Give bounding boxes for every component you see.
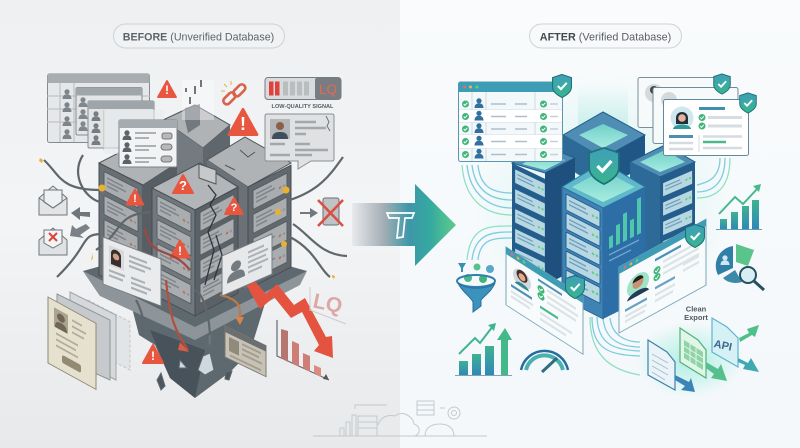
warning: crack: ? xyxy=(231,202,238,214)
table: third sheet xyxy=(88,101,164,154)
warning: front block: ? xyxy=(179,178,187,193)
glow behind servers xyxy=(473,70,733,330)
icon: pie with magnifier xyxy=(716,244,764,290)
panel: before (unverified database) xyxy=(39,24,347,398)
icon: broken chain link xyxy=(221,81,247,106)
arrow: to envelope top xyxy=(71,207,90,220)
right server block xyxy=(630,145,695,290)
verified profile cards xyxy=(638,78,748,156)
profile card: silhouette xyxy=(222,234,272,296)
export: API file: API xyxy=(713,338,733,354)
profile card: woman xyxy=(103,237,161,306)
heading: before xyxy=(114,24,284,48)
falling red trend arrow xyxy=(245,279,333,358)
warning: lower front xyxy=(170,240,190,258)
left server block xyxy=(512,146,575,297)
logo: T mark xyxy=(387,213,414,238)
clean export label: Clean xyxy=(686,304,707,314)
warning: left block: ! xyxy=(133,193,137,205)
profile card: back xyxy=(638,78,720,128)
table: front sheet xyxy=(119,120,177,167)
heading: before: BEFORE (Unverified Database) xyxy=(123,32,274,44)
profile card: front xyxy=(664,100,748,156)
data flow lines xyxy=(462,158,730,375)
heading: after: AFTER (Verified Database) xyxy=(540,32,671,44)
cracked rock base xyxy=(83,240,307,398)
profile card: middle xyxy=(653,88,738,144)
shield: lower right card xyxy=(686,224,704,248)
debris xyxy=(157,335,232,390)
faded ID card xyxy=(225,326,266,377)
warning: left block xyxy=(126,189,144,205)
declining bar chart xyxy=(277,320,329,380)
profile card: lower left xyxy=(506,247,583,354)
front server block xyxy=(152,163,238,316)
table: second sheet xyxy=(76,88,142,135)
warning: under platform xyxy=(143,345,163,363)
warning: large: ! xyxy=(240,114,246,134)
background: before half xyxy=(0,0,400,448)
broken cables xyxy=(44,155,347,350)
low-quality signal meter: LOW-QUALITY SIGNAL xyxy=(272,104,334,110)
warning: under platform: ! xyxy=(151,349,155,363)
panel: after (verified database) xyxy=(455,24,764,398)
profile card: lower right xyxy=(619,219,706,333)
orange arrow into ID card xyxy=(235,317,244,325)
export: document xyxy=(648,340,675,390)
warning: top left xyxy=(158,81,176,97)
warning: lower front: ! xyxy=(178,244,182,258)
icon: gauge xyxy=(521,351,568,372)
sparks xyxy=(39,158,335,279)
profile callout card xyxy=(265,114,334,169)
back server block xyxy=(163,80,230,190)
falling arrow: cable to rock xyxy=(178,342,189,352)
footer line art xyxy=(313,401,487,436)
export: spreadsheet xyxy=(680,328,706,378)
warning: top left: ! xyxy=(165,83,169,97)
shield: lower left card xyxy=(566,275,584,299)
left server block xyxy=(99,147,177,297)
faded profile record xyxy=(48,297,96,389)
warning: front block xyxy=(173,175,193,193)
light beams xyxy=(578,85,628,160)
export glow xyxy=(635,322,745,398)
icon: growth chart xyxy=(455,323,512,376)
shield: front card xyxy=(740,93,756,113)
export arrows xyxy=(675,325,759,392)
warning triangles xyxy=(126,81,257,363)
icon: rising bar chart xyxy=(716,184,762,230)
shield: table xyxy=(553,74,571,98)
envelope: read message xyxy=(39,186,67,215)
center transition arrow xyxy=(352,184,456,266)
export: API file xyxy=(712,318,738,367)
heading: after xyxy=(530,24,682,48)
verified data table xyxy=(458,82,562,162)
shield: back card xyxy=(714,74,730,94)
back server block xyxy=(563,112,645,190)
envelope: rejected message xyxy=(39,228,67,255)
table: back sheet xyxy=(47,74,150,142)
warning: crack xyxy=(225,198,243,214)
stack of low-quality records xyxy=(48,292,130,389)
right server block xyxy=(207,137,291,290)
background: after half xyxy=(400,0,800,448)
clean export label: Export xyxy=(684,313,708,322)
faded LQ chart: LQ xyxy=(311,290,344,318)
warning: large xyxy=(229,109,257,135)
arrow: to envelope bottom xyxy=(70,224,90,238)
low-quality signal meter xyxy=(265,78,341,110)
low-quality signal meter: LQ xyxy=(319,82,337,97)
icon: crossed phone xyxy=(318,198,343,226)
arrow: to phone xyxy=(300,208,318,218)
icon: funnel xyxy=(457,263,495,312)
front server block xyxy=(562,162,645,319)
central shield xyxy=(589,148,619,184)
stacked data tables xyxy=(47,74,177,167)
